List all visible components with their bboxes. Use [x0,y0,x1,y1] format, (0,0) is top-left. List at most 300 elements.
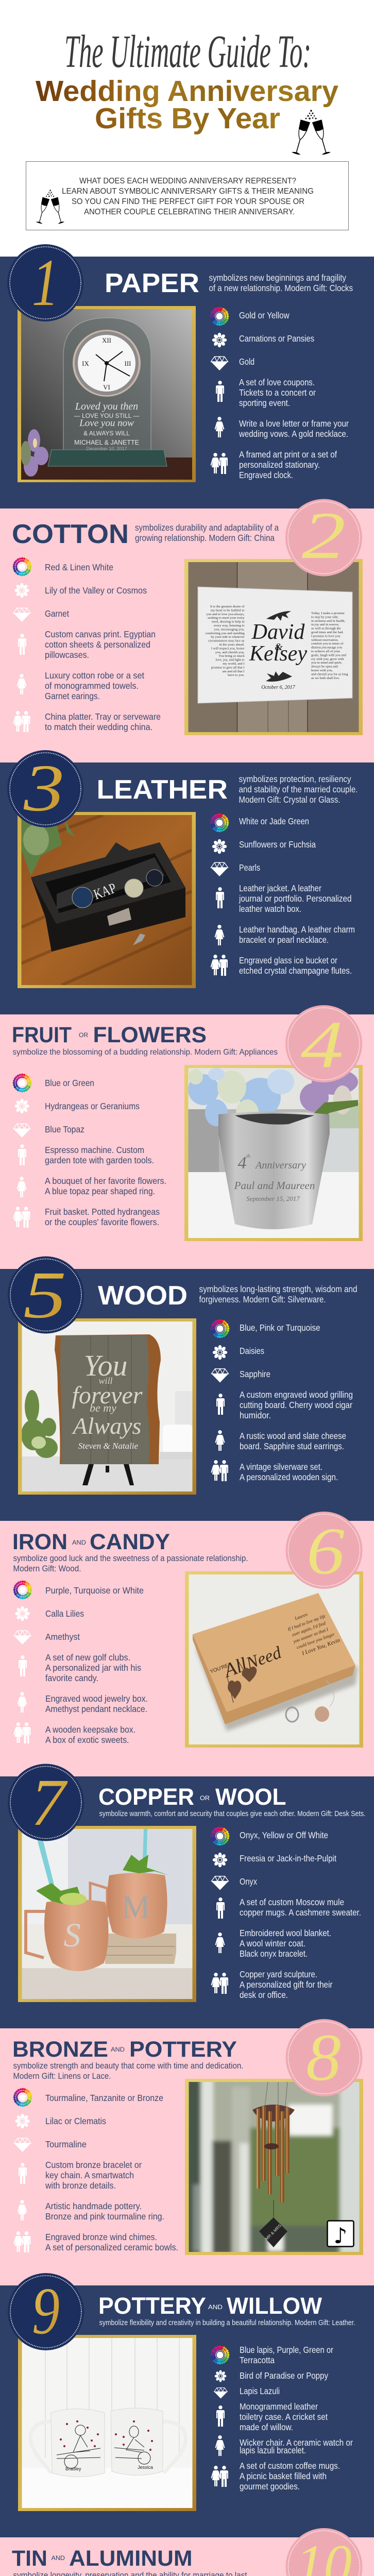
gift list [12,1073,166,1228]
gift for her: board. Sapphire stud earrings. [240,1441,344,1451]
intro text: LEARN ABOUT SYMBOLIC ANNIVERSARY GIFTS & THEIR MEANING [62,187,314,196]
gemstone [214,2386,280,2399]
gift for the couple: A set of personalized ceramic bowls. [45,2242,178,2252]
gift for her [16,670,144,701]
description: Modern Gift: Crystal or Glass. [239,794,340,805]
number badge 1 [7,244,83,321]
color: Purple, Turquoise or White [45,1585,144,1596]
photo: canvas vow print: you, encouraging you, [214,628,245,631]
gift for the couple: gourmet goodies. [240,2481,300,2492]
photo: couple coffee mugs [18,2335,196,2511]
heading: leather: LEATHER [97,775,228,805]
gift for the couple [210,955,352,976]
gift for him: key chain. A smartwatch [45,2170,134,2180]
flower [15,2114,106,2128]
gift for her: Luxury cotton robe or a set [45,670,144,681]
color: Blue or Green [45,1078,94,1088]
gift for the couple: Engraved clock. [239,470,293,480]
photo: copper moscow mule mugs: S [64,1917,80,1954]
panel: year 9 pottery and willow [0,2273,374,2537]
photo: bronze wind chimes: MR & MRS [264,2223,282,2241]
photo: canvas vow print: always be open and [311,665,338,669]
photo: canvas vow print: & [275,641,283,653]
gift for her: Amethyst pendant necklace. [45,1704,147,1714]
photo: canvas vow print: you, and cherish you, [215,651,245,654]
photo: engraved jewelry box: I [244,1666,247,1672]
photo: canvas vow print: you in mind and spirit, [311,661,342,665]
color: Blue, Pink or Turquoise [240,1323,320,1333]
color [210,813,309,833]
photo: slate and wood sign: will [98,1376,113,1386]
gift for the couple [211,2461,340,2492]
gemstone [13,608,69,622]
photo: canvas vow print: October 6, 2017 [261,685,296,690]
photo: canvas vow print: distress,encourage you [311,646,343,650]
gift for him: cotton sheets & personalized [45,639,150,650]
flower: Freesia or Jack-in-the-Pulpit [240,1853,336,1863]
flower [14,1099,140,1113]
photo: canvas vow print: Today, I make a promise [311,612,345,615]
gift for her: A bouquet of her favorite flowers. [45,1176,166,1186]
gift for the couple [211,1969,333,2000]
gift for the couple: A personalized wooden sign. [240,1472,338,1482]
description: of a new relationship. Modern Gift: Clocks [209,283,353,293]
gift for the couple: A picnic basket filled with [240,2471,327,2481]
color: Blue lapis, Purple, Green or [240,2345,333,2355]
panel: year 7 copper or wool [0,1764,374,2028]
photo: engraved silver vase: Paul and Maureen [234,1179,315,1192]
description: symbolizes protection, resiliency [239,774,351,784]
heading: fruit or flowers: FLOWERS [93,1023,207,1047]
heading: tin and aluminum: AND [52,2554,65,2562]
number badge 9: 9 [32,2274,60,2348]
photo: canvas vow print: by your side in whatever [211,635,245,639]
heading: copper or wool: COPPER [98,1784,194,1810]
number badge 4 [285,1005,362,1082]
photo: bronze wind chimes [185,2079,363,2255]
gift list [210,1319,353,1482]
flower: Bird of Paradise or Poppy [240,2370,328,2381]
number badge 10 [285,2528,363,2576]
photo: canvas vow print: seeking to meet your every [208,616,245,620]
photo: canvas vow print: to stay by your side, [311,615,339,619]
photo: engraved jewelry box: YOU'RE [209,1663,229,1675]
gemstone [211,1876,257,1890]
panel: year 3 leather [0,750,374,1014]
gift for him: cutting board. Cherry wood cigar [240,1400,352,1410]
number badge 5 [8,1256,84,1333]
gift for the couple: Engraved bronze wind chimes. [45,2232,157,2242]
photo: canvas vow print: need, desiring to help in [212,620,245,624]
intro text [62,177,314,216]
number badge 8: 8 [306,2021,341,2095]
color: Gold or Yellow [239,310,290,320]
gift for the couple: Engraved glass ice bucket or [239,955,337,965]
gift for him: Espresso machine. Custom [45,1145,144,1155]
photo: canvas vow print: David [251,620,305,644]
gemstone [14,1631,80,1645]
color: Tourmaline, Tanzanite or Bronze [45,2093,163,2103]
color [13,2088,163,2107]
panel: year 1 paper [0,244,374,509]
gift for him: A set of new golf clubs. [45,1652,130,1663]
photo: engraved glass clock: & ALWAYS WILL [83,430,130,437]
gift for him: A personalized jar with his [45,1663,141,1673]
intro text: SO YOU CAN FIND THE PERFECT GIFT FOR YOUR SPOUSE OR [72,197,304,206]
color [210,307,290,326]
flower: Lily of the Valley or Cosmos [45,585,147,596]
number badge 2: 2 [302,499,346,573]
gift list [210,813,355,976]
photo: canvas vow print: and cherish you for as long [311,672,348,676]
gemstone: Sapphire [240,1369,270,1379]
gift for him [18,1144,154,1165]
photo: engraved glass clock: XII [102,336,111,344]
photo: engraved glass clock: MICHAEL & JANETTE [74,439,139,446]
title gold line one: Wedding Anniversary [36,75,338,108]
gift for her: Engraved wood jewelry box. [45,1693,148,1704]
photo: engraved silver vase: Anniversary [254,1160,306,1171]
photo: canvas vow print: Kelsey [249,642,307,666]
intro box [26,162,348,230]
photo: canvas vow print: my heart to be faithful to [211,608,245,612]
photo: canvas vow print: I will respect you, honor [211,647,245,650]
photo: engraved jewelry box: Lauren [294,1612,309,1621]
photo: engraved glass clock: Love you now [79,418,134,429]
gift for him: pillowcases. [45,650,89,660]
gift for him: Custom canvas print. Egyptian [45,629,156,639]
gift for him [19,2160,142,2191]
description: growing relationship. Modern Gift: China [135,533,275,543]
gift for her [215,1430,346,1451]
gift for her: Leather handbag. A leather charm [239,924,355,935]
gift for him: favorite candy. [45,1673,98,1683]
heading: iron and candy: IRON [12,1530,67,1554]
gift for the couple [13,1722,135,1745]
intro text: ANOTHER COUPLE CELEBRATING THEIR ANNIVERSARY. [84,208,295,216]
flower: Lilac or Clematis [45,2116,106,2126]
photo: engraved silver vase: th [246,1154,250,1159]
photo: engraved glass clock [18,306,196,482]
photo: canvas vow print: It is the greatest desire of [210,605,245,608]
gift for her: A rustic wood and slate cheese [240,1431,346,1441]
color [13,1580,144,1600]
gift for him [216,377,316,408]
description [13,1554,248,1573]
flower: Sunflowers or Fuchsia [239,839,316,850]
title [36,26,338,135]
gift for him [18,629,156,660]
gift for her [18,1692,148,1714]
gemstone [14,2138,87,2152]
gemstone: Lapis Lazuli [240,2386,280,2396]
photo: engraved glass clock: IX [82,360,89,367]
photo: canvas vow print: every way, listening to [214,624,245,628]
gift for her: A wool winter coat. [240,1938,305,1948]
photo: canvas vow print: my world, and I [223,662,244,666]
gift for him: made of willow. [240,2422,293,2432]
photo: canvas vow print: in sickness and in health, [311,619,345,623]
number badge 4: 4 [301,1008,344,1082]
title gold line two: Gifts By Year [95,102,280,135]
photo: engraved jewelry box: Need [243,1643,284,1673]
color [210,1826,328,1846]
color: Terracotta [240,2355,275,2365]
color [210,1319,320,1338]
heading: tin and aluminum [12,2546,193,2571]
photo: engraved glass clock: III [125,360,131,367]
heading: bronze and pottery: AND [111,2046,125,2053]
gift for her: of monogrammed towels. [45,681,139,691]
photo: canvas vow print: have to you. [228,673,245,677]
photo: canvas vow print: circumstances may face us [208,639,245,643]
heading: copper or wool: WOOL [215,1784,286,1810]
gemstone [13,1124,84,1138]
photo: leather watch box: KAP [92,880,118,903]
gift for him: with bronze details. [45,2180,116,2191]
icon: small champagne toast [36,190,64,224]
description: forgiveness. Modern Gift: Silverware. [199,1294,326,1304]
color: Onyx, Yellow or Off White [240,1830,328,1840]
gift for him: Leather jacket. A leather [239,883,321,893]
gift for him [216,883,351,914]
photo: canvas vow print: goals, laugh with you and [311,653,347,657]
description [209,273,353,293]
flower [213,1853,336,1867]
flower [15,1606,84,1621]
gift for her: A blue topaz pear shaped ring. [45,1186,155,1196]
gift for him: Tickets to a concert or [239,387,316,398]
description: symbolize the blossoming of a budding relationship. Modern Gift: Appliances [12,1048,278,1057]
panel: year 6 iron and candy [0,1512,374,1776]
number badge 3: 3 [23,751,64,825]
photo: canvas vow print: am and all that I [223,670,244,673]
gemstone: Onyx [240,1876,257,1887]
gift for the couple: etched crystal champagne flutes. [239,965,352,976]
heading: copper or wool [98,1784,286,1810]
photo: couple coffee mugs: Jessica [138,2465,153,2470]
photo: canvas vow print: You bring so much [218,654,245,658]
gift list [12,557,161,732]
gift for her: Artistic handmade pottery. [45,2201,142,2211]
heading: tin and aluminum: ALUMINUM [69,2546,193,2571]
gift list [13,1580,148,1745]
flower: Calla Lilies [45,1608,84,1619]
heading: pottery and willow: WILLOW [227,2293,322,2319]
color [12,1073,94,1093]
photo: copper moscow mule mugs: M [122,1890,150,1925]
description: Modern Gift: Linens or Lace. [13,2072,111,2081]
panel: year 5 wood [0,1256,374,1521]
description [239,774,358,805]
gift for the couple: A wooden keepsake box. [45,1724,135,1735]
photo: slate and wood sign: be my [90,1401,116,1414]
gift for her: Wicker chair. A ceramic watch or [240,2437,353,2448]
photo: canvas vow print: comfort you in times of [311,642,344,646]
gift for her [215,2435,353,2456]
gift for her: lapis lazuli bracelet. [240,2445,306,2455]
gift for the couple: Fruit basket. Potted hydrangeas [45,1207,160,1217]
gemstone: Pearls [239,862,260,873]
photo: engraved jewelry box: All [219,1654,250,1682]
gift for the couple: A personalized gift for their [240,1979,333,1990]
photo: engraved glass clock: VI [103,383,110,391]
gift list [210,307,349,480]
gemstone: Amethyst [45,1632,80,1642]
description: and stability of the married couple. [239,784,358,794]
photo: canvas vow print: without reservation, [311,638,338,642]
number badge 2 [285,499,362,576]
heading: pottery and willow [98,2293,322,2319]
gift for him: A custom engraved wood grilling [240,1389,353,1400]
photo: copper moscow mule mugs [18,1826,196,2002]
gift list [210,1826,361,2000]
gemstone [211,1369,270,1383]
number badge 8 [285,2019,363,2096]
color [12,557,113,577]
gift for the couple: or the couples' favorite flowers. [45,1217,159,1227]
gift for the couple [13,711,161,732]
photo: canvas vow print: I promise to love you [311,634,341,638]
panel: year 2 cotton [0,499,374,762]
color: White or Jade Green [239,816,309,826]
heading: tin and aluminum: TIN [12,2546,47,2571]
gift list [210,2345,353,2492]
gift for her [215,1928,331,1959]
heading: pottery and willow: AND [208,2303,223,2311]
photo: leather watch box [18,812,196,988]
gift for her: wedding vows. A gold necklace. [239,429,348,439]
heading: copper or wool: OR [200,1794,210,1802]
heading: wood: WOOD [98,1281,188,1311]
gift for him [19,1652,141,1683]
gift for the couple: personalized stationary. [239,460,320,470]
description [135,522,279,543]
gift for her: Garnet earings. [45,691,100,701]
gift list [13,2088,178,2252]
icon: music note: ♪ [334,2223,347,2248]
photo: slate and wood sign [18,1318,196,1495]
photo: canvas vow print: comforting you and standing [205,632,245,635]
gift for the couple [210,449,337,480]
gift for the couple: Copper yard sculpture. [240,1969,317,1979]
photo: engraved silver vase: 4 [238,1154,246,1173]
photo: engraved jewelry box: If I had to live my life [286,1613,326,1632]
photo: engraved jewelry box: you sooner so that I [292,1626,329,1644]
photo: canvas vow print [184,559,363,735]
heading: paper: PAPER [105,268,199,298]
gift for the couple [13,1207,160,1228]
gift for him [216,1389,353,1420]
gift for him: leather watch box. [239,904,301,914]
flower: Hydrangeas or Geraniums [45,1101,140,1111]
heading: pottery and willow: POTTERY [98,2293,206,2319]
gift for him: A set of custom Moscow mule [240,1897,344,1907]
gift for the couple: China platter. Tray or serveware [45,711,161,722]
gemstone [211,357,254,370]
number badge 6 [285,1512,363,1589]
photo: engraved glass clock: Loved you then [75,401,138,412]
color: Red & Linen White [45,562,113,572]
heading: fruit or flowers [12,1023,207,1047]
photo: canvas vow print: as we both shall live. [311,676,340,680]
photo: slate and wood sign: Always [72,1413,141,1439]
photo: engraved silver vase: September 15, 2017 [246,1195,300,1202]
heading: iron and candy: AND [72,1539,86,1546]
photo: canvas vow print: cry with you, grow with [311,657,344,661]
description: symbolizes durability and adaptability of a [135,522,279,533]
gift for him: sporting event. [239,398,290,408]
photo: canvas vow print: good times and the bad. [311,631,344,634]
number badge 7 [8,1764,84,1841]
gift for the couple: A box of exotic sweets. [45,1735,129,1745]
gemstone: Blue Topaz [45,1124,84,1134]
number badge 1: 1 [32,246,59,320]
gift for him: A set of love coupons. [239,377,315,387]
photo: engraved silver vase [184,1065,363,1241]
photo: engraved jewelry box: over again, I'd find [291,1620,327,1637]
gift for her: Bronze and pink tourmaline ring. [45,2211,164,2222]
heading: bronze and pottery: POTTERY [129,2037,237,2062]
gift for the couple: to match their wedding china. [45,722,152,732]
flower [14,583,147,598]
gift for the couple: A framed art print or a set of [239,449,337,460]
color [210,2345,333,2365]
photo: canvas vow print: to achieve all of your [311,650,341,653]
number badge 5: 5 [23,1258,66,1332]
photo: slate and wood sign: You [84,1349,127,1382]
gift for the couple: desk or office. [240,1990,288,2000]
gemstone: Gold [239,357,254,367]
photo: engraved glass clock: — LOVE YOU STILL — [74,412,139,419]
gift for her [18,2200,164,2222]
gift for the couple: A set of custom coffee mugs. [240,2461,340,2471]
heading: fruit or flowers: OR [79,1031,88,1039]
gemstone: Garnet [45,608,69,619]
photo: canvas vow print: in joy and in sorrow, [311,623,339,626]
panel: year 8 bronze and pottery [0,2019,374,2285]
heading: fruit or flowers: FRUIT [12,1023,72,1047]
gift for her [214,924,355,945]
photo: engraved jewelry box: I Love You, Kevin [301,1637,341,1657]
gift for her: Write a love letter or frame your [239,418,349,429]
description [13,2061,243,2081]
photo: canvas vow print: as well as through the [311,627,341,631]
gift for him: Custom bronze bracelet or [45,2160,142,2170]
gemstone: Tourmaline [45,2139,87,2149]
flower [215,2370,328,2382]
heading: iron and candy: CANDY [90,1530,170,1554]
gift for him: garden tote with garden tools. [45,1155,154,1165]
gift for him [216,1897,361,1919]
gift for her: bracelet or pearl necklace. [239,935,329,945]
gift for her [16,1176,166,1197]
flower: Carnations or Pansies [239,333,314,344]
photo: engraved jewelry box: could love you longer [296,1631,336,1650]
number badge 9 [8,2273,84,2350]
photo: canvas vow print: love, joy, and light to [216,658,245,662]
gift for him: Monogrammed leather [240,2401,318,2412]
gift for the couple [211,1460,338,1482]
description: symbolizes new beginnings and fragility [209,273,346,283]
photo: engraved glass clock: December 10, 2017 [86,446,127,451]
panel: year 4 fruit or flowers [0,1005,374,1269]
gift for the couple: A vintage silverware set. [240,1462,322,1472]
heading: bronze and pottery [12,2037,237,2062]
gift for her: Embroidered wool blanket. [240,1928,331,1938]
flower: Daisies [240,1346,264,1356]
gift for her [214,417,349,439]
